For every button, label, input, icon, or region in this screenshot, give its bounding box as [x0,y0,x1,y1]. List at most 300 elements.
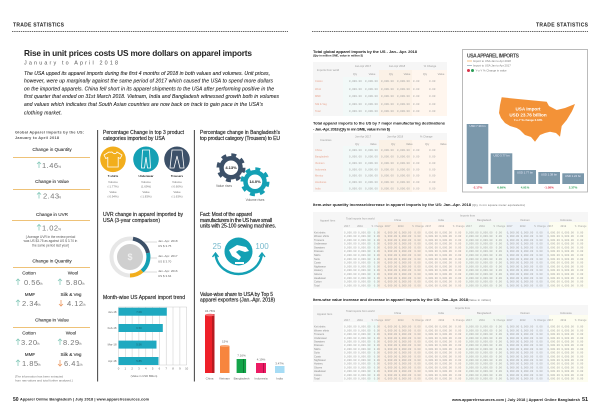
table rows [315,79,445,113]
table rows [314,325,588,380]
panel: global apparel imports key figures [12,130,90,382]
table rows: Total [315,109,321,113]
supplier share labels: -1.08% [544,186,554,190]
table rows: Underwear [314,336,327,340]
table rows: 0,000.00 0,000.00 0.00 0,000.00 0,000.00 0.00 0,000.00 0,000.00 0.00 0,000.00 0,000.00 0.00 0,000.00 0,000.00 0.00 0,000.00 0,000.00 0.00 [344,254,588,257]
range labels [213,242,269,251]
metric: change in value: Change in Value [35,179,69,184]
metric group: value by fibre: 1.85 [22,359,39,368]
value labels [205,309,284,366]
heading: (Qty in million SME, value in million $) [313,54,363,58]
intro text: clothing market. [24,110,62,116]
range labels: 25 [213,242,222,251]
table rows: 0,000.00 0,000.00 0.00 0,000.00 0,000.00 0.00 0,000.00 0,000.00 0.00 0,000.00 0,000.00 0.00 0,000.00 0,000.00 0.00 0,000.00 0,000.00 0.00 [344,348,588,351]
table rows: 0,000.00 0,000.00 0.00 0,000.00 0,000.00 0.00 0,000.00 0,000.00 0.00 0,000.00 0,000.00 0.00 0,000.00 0,000.00 0.00 0,000.00 0,000.00 0.00 [344,340,588,344]
category figures: (-0.94%) [107,194,119,198]
metric group: quantity by fibre [13,258,90,308]
heading: units with 25-100 sewing machines. [200,224,276,230]
table rows: 0,000.00 0,000.00 0,000.00 0,000.00 0.00 0.00 [349,88,445,91]
table headers [320,214,588,228]
donut leader lines and labels: US $ 3.70 [158,260,172,264]
table rows: 0,000.00 0,000.00 0.00 0,000.00 0,000.00 0.00 0,000.00 0,000.00 0.00 0,000.00 0,000.00 0.00 0,000.00 0,000.00 0.00 0,000.00 0,000.00 0.00 [344,269,588,272]
table rows: 0,000.00 0,000.00 0.00 0,000.00 0,000.00 0.00 0,000.00 0,000.00 0.00 0,000.00 0,000.00 0.00 0,000.00 0,000.00 0.00 0,000.00 0,000.00 0.00 [344,378,588,380]
category figures: Trousers [171,174,183,178]
legend: Import to USA Jan to Apr 2017 [473,64,511,68]
donut leader lines and labels: Jan.-Apr. 2016 [158,269,178,273]
heading: - Jan.-Apr. 2018 (Qty in mn SME, value in mn $) [313,126,391,132]
table rows: 0,000.00 0,000.00 0.00 0,000.00 0,000.00 0.00 0,000.00 0,000.00 0.00 0,000.00 0,000.00 0.00 0,000.00 0,000.00 0.00 0,000.00 0,000.00 0.00 [344,352,588,355]
heading [103,212,184,224]
icon: trousers [164,146,190,172]
metric group: value by fibre: % [78,342,82,346]
gear captions [216,184,265,202]
heading: Item-wise quantity increase/decrease in apparel imports by the US: Jan.-Apr. 2018 [313,202,472,207]
metric: change in UVR: was US $3.75 as against US $ 3.70 in [24,239,78,243]
heading: USA (3-year comparison) [103,218,160,224]
panel: USA apparel imports [462,50,588,192]
panel: top 5 exporters chart [200,292,284,380]
table rows: Knit shirts [314,230,326,234]
table headers: Value [438,72,445,76]
arrow arc [212,253,265,274]
metric group: value by fibre: % [38,363,41,367]
table: total global apparel imports [313,49,447,116]
column divider left [97,130,99,382]
axis labels: 10 [185,366,189,370]
legend: Import to USA Jan to Apr 2018 [473,59,511,63]
heading [200,212,276,230]
table headers: Value [440,142,447,146]
table rows: Gloves [314,365,323,369]
running header right: TRADE STATISTICS [536,22,589,28]
heading: Percentage change in Bangladesh's [200,130,280,136]
table rows: Headwear [314,369,326,373]
table rows: Hosiery [314,268,323,272]
table rows: Nightwear [314,264,326,268]
table rows: 0,000.00 0,000.00 0.00 0,000.00 0,000.00 0.00 0,000.00 0,000.00 0.00 0,000.00 0,000.00 0.00 0,000.00 0,000.00 0.00 0,000.00 0,000.00 0.00 [344,355,588,358]
heading: Fact: Most of the apparel [200,212,252,218]
metric group: value by fibre: 6.41 [64,359,81,368]
footnote: from raw values and total further analysed.] [15,378,73,382]
month labels: Jan-18 [108,310,117,314]
table headers: Imports from world [317,68,340,72]
table rows: Skirts [314,253,321,257]
panel frame [462,50,588,192]
table rows: 0,000.00 0,000.00 0.00 0,000.00 0,000.00 0.00 0,000.00 0,000.00 0.00 0,000.00 0,000.00 0.00 0,000.00 0,000.00 0.00 0,000.00 0,000.00 0.00 [344,231,588,234]
table rows: 0,000.00 0,000.00 0,000.00 0,000.00 0.00 0.00 [349,95,445,98]
table rows: Skirts [314,347,321,351]
intro text: and values which indicates that South Asian countries are now back on track to gain pace in the USA's [24,102,264,108]
value labels: 4.19% [257,358,266,362]
category figures: Volume [108,180,118,184]
intro text: first quarter that ended on 31st March 2018. Vietnam, India and Bangladesh witnessed growth both in volumes [24,94,280,100]
icon: value gear: 4.13% [225,165,237,170]
table headers: Qty [389,72,394,76]
table rows: 0,000.00 0,000.00 0.00 0,000.00 0,000.00 0.00 0,000.00 0,000.00 0.00 0,000.00 0,000.00 0.00 0,000.00 0,000.00 0.00 0,000.00 0,000.00 0.00 [344,273,588,276]
heading: Total global apparel imports by the US - Jan.- Apr. 2018 [313,49,418,54]
bar value labels [136,310,142,363]
supplier bars [467,124,584,184]
metric group: quantity by fibre: Cotton [22,270,36,276]
table rows: 0,000.00 0,000.00 0.00 0,000.00 0,000.00 0.00 0,000.00 0,000.00 0.00 0,000.00 0,000.00 0.00 0,000.00 0,000.00 0.00 0,000.00 0,000.00 0.00 [344,366,588,369]
metric group: value by fibre: Wool [66,330,76,336]
table headers: Value [404,72,411,76]
metric group: value by fibre: 3.20 [21,338,38,347]
table headers: Qty [423,72,428,76]
intro text [24,71,280,116]
legend: Y-o-Y % Change in value [476,68,507,72]
map text: USD 23.76 billion [509,112,547,118]
table rows: Mexico [315,174,324,178]
table rows: 0,000.00 0,000.00 0.00 0,000.00 0,000.00 0.00 0,000.00 0,000.00 0.00 0,000.00 0,000.00 0.00 0,000.00 0,000.00 0.00 0,000.00 0,000.00 0.00 [344,284,588,287]
table rows: Wool [315,87,321,91]
metric: change in value: 2.43 [43,192,60,200]
table rows: 0,000.00 0,000.00 0.00 0,000.00 0,000.00 0.00 0,000.00 0,000.00 0.00 0,000.00 0,000.00 0.00 0,000.00 0,000.00 0.00 0,000.00 0,000.00 0.00 [344,344,588,347]
footer left: Apparel Online Bangladesh | July 2018 | www.apparelresources.com [20,398,150,402]
table rows: 0,000.00 0,000.00 0,000.00 0,000.00 0.00 0.00 [349,175,445,178]
table rows: Coats [314,354,321,358]
map of USA [499,97,575,142]
metric: change in value: % [58,196,61,200]
table rows: 0,000.00 0,000.00 0.00 0,000.00 0,000.00 0.00 0,000.00 0,000.00 0.00 0,000.00 0,000.00 0.00 0,000.00 0,000.00 0.00 0,000.00 0,000.00 0.00 [344,239,588,242]
intro text: however, were up marginally against the same period of 2017 which caused the USA to spend more dollars [24,79,274,85]
table rows: Indonesia [315,167,327,171]
panel: product categories [100,130,190,198]
metric: change in UVR [12,212,90,248]
table rows: Dresses [314,343,324,347]
axis labels [118,366,189,378]
donut leader lines and labels: US $ 3.75 [158,244,172,248]
table rows: India [315,187,321,191]
table headers: China [394,311,402,315]
panel: month-wise bar chart [103,295,189,378]
table rows: 0,000.00 0,000.00 0.00 0,000.00 0,000.00 0.00 0,000.00 0,000.00 0.00 0,000.00 0,000.00 0.00 0,000.00 0,000.00 0.00 0,000.00 0,000.00 0.00 [344,258,588,261]
table rows [314,230,588,287]
supplier share labels: 6.69% [497,186,506,190]
table rows [315,148,445,191]
bar labels: USD 1.38 bn [541,172,557,176]
table headers: India [438,218,444,222]
table headers [320,134,447,146]
axis labels: 0 [118,366,120,370]
heading: top product category (Trousers) to EU [200,136,280,142]
table rows: Coats [314,261,321,265]
table rows: 0,000.00 0,000.00 0,000.00 0,000.00 0.00 0.00 [349,80,445,83]
intro text: on the imported apparels. China fell short in its apparel shipments to the USA after performing positive in the [24,87,274,93]
table headers: Vietnam [520,218,531,222]
donut leader lines and labels: Jan.-Apr. 2018 [158,239,178,243]
table rows: 0,000.00 0,000.00 0.00 0,000.00 0,000.00 0.00 0,000.00 0,000.00 0.00 0,000.00 0,000.00 0.00 0,000.00 0,000.00 0.00 0,000.00 0,000.00 0.00 [344,281,588,284]
bar labels: USD 1.77 bn [517,170,533,174]
table rows: Bangladesh [315,155,329,159]
3D bars [205,314,284,373]
table rows: Sweaters [314,340,326,344]
axis labels: 4 [145,366,147,370]
bar value labels: 5.85 [136,359,142,363]
table headers: Value [370,142,377,146]
table rows: 0,000.00 0,000.00 0.00 0,000.00 0,000.00 0.00 0,000.00 0,000.00 0.00 0,000.00 0,000.00 0.00 0,000.00 0,000.00 0.00 0,000.00 0,000.00 0.00 [344,277,588,280]
table headers: Jan-Apr 2017 [355,64,372,68]
table rows: 0,000.00 0,000.00 0,000.00 0,000.00 0.00 0.00 [349,110,445,113]
table rows: Honduras [315,180,327,184]
bar labels: USD 7.39 bn [469,124,486,128]
heading [200,292,275,304]
bar labels: USD 1.24 bn [565,174,581,178]
heading [313,120,446,132]
table rows: Cotton [314,373,322,377]
title: Rise in unit prices costs US more dollars on apparel imports [24,48,252,58]
table rows: 0,000.00 0,000.00 0,000.00 0,000.00 0.00 0.00 [349,156,445,159]
donut chart: $ [127,252,133,262]
table rows: Trousers [314,238,325,242]
metric group: quantity by fibre: 2.34 [22,299,39,308]
table rows: 0,000.00 0,000.00 0,000.00 0,000.00 0.00 0.00 [349,149,445,152]
heading: categories imported by USA [103,136,166,142]
table background [313,212,588,288]
table headers: Bangladesh [477,218,492,222]
intro text: The USA upped its apparel imports during the first 4 months of 2018 in both values and volumes. Unit prices, [24,71,270,77]
icon: t-shirt [100,146,126,172]
donut leader lines and labels [144,239,178,278]
table rows: Cotton [315,79,323,83]
table rows: Dresses [314,249,324,253]
metric group: value by fibre: 8.29 [63,338,80,347]
panel heading: Global Apparel Imports by the US: [15,130,84,134]
table headers: Value [369,72,376,76]
metric: change in UVR: the same period last year] [32,244,69,248]
metric group: value by fibre: Cotton [22,330,36,336]
metric group: quantity by fibre: Change in Quantity [32,258,72,264]
table headers: 2017 2018 % Change 2017 2018 % Change 2017 2018 % Change 2017 2018 % Change 2017 2018 % Change 2017 2018 % Change [344,225,588,228]
heading: UVR change in apparel imported by [103,212,184,218]
value labels: 7.16% [237,354,246,358]
metric: change in value [13,179,90,200]
table headers: Bangladesh [477,311,492,315]
axis labels: 7 [165,366,167,370]
table headers: Indonesia [560,311,572,315]
month labels: Apr-18 [108,359,117,363]
metric group: quantity by fibre: 0.56 [24,278,41,287]
table rows: Total [314,376,320,380]
heading: Value-wise share to USA by Top 5 [200,292,273,298]
table background [313,133,447,192]
table headers: 2017 2018 % Change 2017 2018 % Change 2017 2018 % Change 2017 2018 % Change 2017 2018 % Change 2017 2018 % Change [344,319,588,322]
metric group: value by fibre: % [36,342,40,346]
axis labels: 9 [179,366,181,370]
table rows: Gloves [314,272,323,276]
heading: manufacturers in the US have small [200,218,272,224]
table rows: 0,000.00 0,000.00 0.00 0,000.00 0,000.00 0.00 0,000.00 0,000.00 0.00 0,000.00 0,000.00 0.00 0,000.00 0,000.00 0.00 0,000.00 0,000.00 0.00 [344,235,588,238]
metric group: value by fibre: Change in Value [35,318,69,322]
table: item-wise quantity [313,202,588,288]
metric group: value by fibre [13,318,90,368]
country labels: Vietnam [219,376,230,380]
footer left [13,397,150,403]
metric: change in quantity [13,147,90,170]
table rows: 0,000.00 0,000.00 0.00 0,000.00 0,000.00 0.00 0,000.00 0,000.00 0.00 0,000.00 0,000.00 0.00 0,000.00 0,000.00 0.00 0,000.00 0,000.00 0.00 [344,329,588,332]
supplier share labels: 2.37% [569,186,578,190]
panel: Bangladesh top product [200,130,280,202]
table: item-wise value [313,297,588,382]
bars [118,308,167,365]
table headers: Indonesia [560,218,572,222]
donut leader lines and labels: Jan.-Apr. 2017 [158,254,178,258]
table rows: 0,000.00 0,000.00 0.00 0,000.00 0,000.00 0.00 0,000.00 0,000.00 0.00 0,000.00 0,000.00 0.00 0,000.00 0,000.00 0.00 0,000.00 0,000.00 0.00 [344,370,588,373]
table rows: Vietnam [315,161,324,165]
donut leader lines and labels: US $ 3.64 [158,274,172,278]
table headers: % Change [420,134,433,138]
metric: change in UVR: % [58,228,61,232]
table headers: Apparel Item [317,312,333,316]
metric group: quantity by fibre: MMF [25,292,35,297]
heading: Item-wise value increase and decrease in apparel imports by the US: Jan.-Apr. 2018 [313,297,469,302]
table rows: 0,000.00 0,000.00 0,000.00 0,000.00 0.00 0.00 [349,103,445,106]
table rows: 0,000.00 0,000.00 0.00 0,000.00 0,000.00 0.00 0,000.00 0,000.00 0.00 0,000.00 0,000.00 0.00 0,000.00 0,000.00 0.00 0,000.00 0,000.00 0.00 [344,359,588,362]
table rows: Woven shirts [314,234,330,238]
footer right: www.apparelresources.com | July 2018 | Apparel Online Bangladesh [451,398,581,402]
bar value labels: 5.56 [136,343,142,347]
heading [200,130,280,142]
table rows: 0,000.00 0,000.00 0,000.00 0,000.00 0.00 0.00 [349,188,445,191]
heading: Percentage Change in top 3 product [103,130,185,136]
legend [467,59,511,72]
metric: change in UVR: 1.02 [42,224,59,232]
table rows: MMF [315,94,321,98]
country labels [206,376,283,380]
category figures: Underwear [139,174,154,178]
table rows: 0,000.00 0,000.00 0.00 0,000.00 0,000.00 0.00 0,000.00 0,000.00 0.00 0,000.00 0,000.00 0.00 0,000.00 0,000.00 0.00 0,000.00 0,000.00 0.00 [344,246,588,249]
metric group: quantity by fibre: Wool [68,270,78,276]
metric: change in quantity: Change in Quantity [32,147,72,152]
panel title: USA APPAREL IMPORTS [467,54,520,60]
footnote: [The information has been extracted [15,374,63,378]
heading [313,49,418,58]
metric group: quantity by fibre: % [38,303,41,307]
table headers: Imports from [455,306,471,310]
category figures: Value [109,190,117,194]
table rows: 0,000.00 0,000.00 0.00 0,000.00 0,000.00 0.00 0,000.00 0,000.00 0.00 0,000.00 0,000.00 0.00 0,000.00 0,000.00 0.00 0,000.00 0,000.00 0.00 [344,374,588,377]
icon: volume gear: 14.0% [249,179,261,184]
table headers: Jan-Apr 2018 [387,134,404,138]
table headers: Qty [355,142,360,146]
table rows: Suits [314,351,320,355]
table rows: 0,000.00 0,000.00 0,000.00 0,000.00 0.00 0.00 [349,168,445,171]
footer right [451,397,588,403]
table headers: Jan-Apr 2018 [389,64,406,68]
panel: UVR donut [103,212,184,278]
category figures: (-1.77%) [107,184,119,188]
axis labels: (Value in USD Billion) [131,374,157,378]
axis labels: 5 [152,366,154,370]
map text: USA Import [515,106,541,112]
metric group: quantity by fibre: % [82,282,85,286]
table headers: China [394,218,402,222]
table headers: Jan-Apr 2017 [355,134,372,138]
heading: (Value in million) [468,298,491,302]
subtitle: January to April 2018 [24,60,118,66]
heading: apparel exporters (Jan.-Apr. 2018) [200,298,275,304]
category figures: (-1.83%) [140,194,152,198]
map text [509,106,547,122]
metric group: quantity by fibre: 5.80 [66,278,83,287]
table background [313,62,447,116]
bar labels: USD 3.77 bn [493,154,510,158]
table headers: Countries [320,138,332,142]
column divider right [193,130,195,382]
table rows: 0,000.00 0,000.00 0.00 0,000.00 0,000.00 0.00 0,000.00 0,000.00 0.00 0,000.00 0,000.00 0.00 0,000.00 0,000.00 0.00 0,000.00 0,000.00 0.00 [344,326,588,329]
table headers: Imports from [460,214,476,218]
panel heading: January to April 2018 [15,136,59,140]
country labels: India [276,376,283,380]
value labels: 34.76% [205,309,215,313]
category figures: Value [142,190,150,194]
category figures: Value [173,190,181,194]
value labels: 15% [222,340,228,344]
metric: change in quantity: 1.46 [42,161,59,170]
panel heading [15,130,84,140]
heading: (Qty in mn square meter equivalents) [472,203,525,207]
heading [103,130,185,142]
metric group: value by fibre: Silk & Veg [61,352,82,357]
month labels [108,310,117,363]
table rows: 0,000.00 0,000.00 0.00 0,000.00 0,000.00 0.00 0,000.00 0,000.00 0.00 0,000.00 0,000.00 0.00 0,000.00 0,000.00 0.00 0,000.00 0,000.00 0.00 [344,265,588,268]
month labels: Mar-18 [108,343,117,347]
map text: Y-o-Y % change 2.43% [514,118,543,122]
table rows: 0,000.00 0,000.00 0.00 0,000.00 0,000.00 0.00 0,000.00 0,000.00 0.00 0,000.00 0,000.00 0.00 0,000.00 0,000.00 0.00 0,000.00 0,000.00 0.00 [344,337,588,340]
grid lines [118,307,187,365]
table rows: Sweaters [314,245,326,249]
metric group: quantity by fibre: Silk & Veg [61,292,82,297]
table headers: Qty [353,72,358,76]
table headers: Qty [425,142,430,146]
bar labels [469,124,581,178]
table rows: Nightwear [314,358,326,362]
country labels: Bangladesh [234,376,250,380]
table headers [317,306,588,322]
category figures: (-1.63%) [171,194,183,198]
metric group: value by fibre: MMF [25,352,35,357]
table rows: Cotton [314,280,322,284]
range labels: 100 [255,242,269,251]
table: top 7 destinations [313,120,447,192]
category figures: (-0.60%) [171,184,183,188]
gear captions: Volume rises [246,198,265,202]
month labels: Feb-18 [108,326,117,330]
table headers: India [438,311,444,315]
table headers: Total imports from world [346,309,375,313]
supplier share labels: 4.91% [521,186,530,190]
table rows: Total [314,283,320,287]
metric group: quantity by fibre: % [82,303,86,307]
table rows: Trousers [314,332,325,336]
category figures: Volume [172,180,182,184]
axis labels: 1 [125,366,127,370]
axis labels: 3 [138,366,140,370]
value labels: 3.47% [275,362,284,366]
table headers [317,64,445,76]
table headers: % Change [424,64,437,68]
axis labels: 2 [131,366,133,370]
category figures [107,174,183,198]
metric group: quantity by fibre: 4.12 [67,299,84,308]
running header left: TRADE STATISTICS [13,22,65,28]
gear captions: Value rises [216,184,232,188]
metric group: quantity by fibre: % [40,282,43,286]
heading: Month-wise US Apparel import trend [103,295,185,301]
panel: sewing machine fact [200,212,276,274]
category figures: T-shirts [108,174,119,178]
table headers: Vietnam [520,311,531,315]
